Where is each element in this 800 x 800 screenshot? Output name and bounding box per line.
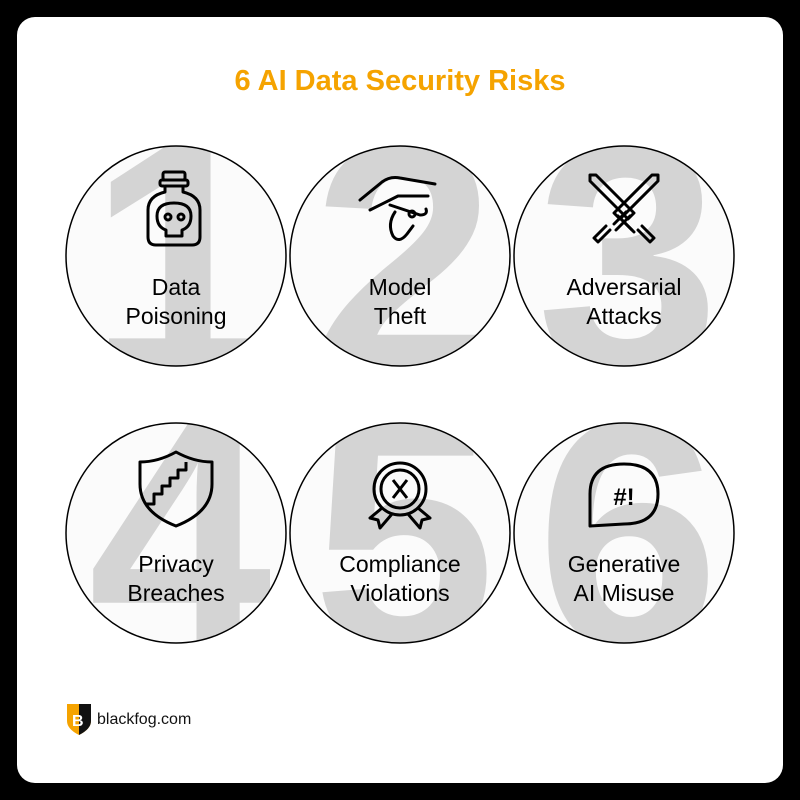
icon: hand (360, 178, 435, 240)
panel: privacy breaches: Breaches (127, 580, 225, 606)
title: 6 AI Data Security Risks (235, 65, 565, 97)
logo (67, 704, 191, 735)
panel: privacy breaches: 4 (88, 350, 274, 719)
label: Generative (568, 551, 680, 577)
panel: compliance violations: 5 (312, 350, 496, 719)
panel: adversarial attacks: 3 (536, 73, 720, 442)
panel: compliance violations: Violations (350, 580, 450, 606)
icon: broken shield (140, 452, 212, 526)
label: Privacy (138, 551, 214, 577)
panel: data poisoning: 1 (88, 73, 272, 442)
panel: model theft (289, 145, 511, 367)
panel: model theft: Theft (374, 303, 427, 329)
panel: privacy breaches (65, 422, 287, 644)
icon: speech bubble: #! (613, 484, 635, 511)
logo: blackfog.com (97, 711, 191, 728)
panel: adversarial attacks (513, 145, 735, 367)
icon: speech bubble (590, 464, 658, 526)
panel: generative ai misuse: 6 (536, 350, 720, 719)
panel: generative ai misuse: AI Misuse (574, 580, 674, 606)
panel: adversarial attacks: Attacks (586, 303, 662, 329)
panel: model theft: 2 (312, 73, 496, 442)
label: Data (152, 274, 200, 300)
logo: B (72, 713, 84, 730)
icon: badge with X (370, 463, 430, 528)
panel: generative ai misuse (513, 422, 735, 644)
panel: data poisoning (65, 145, 287, 367)
label: Adversarial (566, 274, 682, 300)
label: Compliance (339, 551, 461, 577)
icon: crossed swords (590, 175, 658, 242)
panel: data poisoning: Poisoning (125, 303, 227, 329)
label: Model (369, 274, 431, 300)
panel: compliance violations (289, 422, 511, 644)
icon: poison bottle (148, 172, 200, 245)
